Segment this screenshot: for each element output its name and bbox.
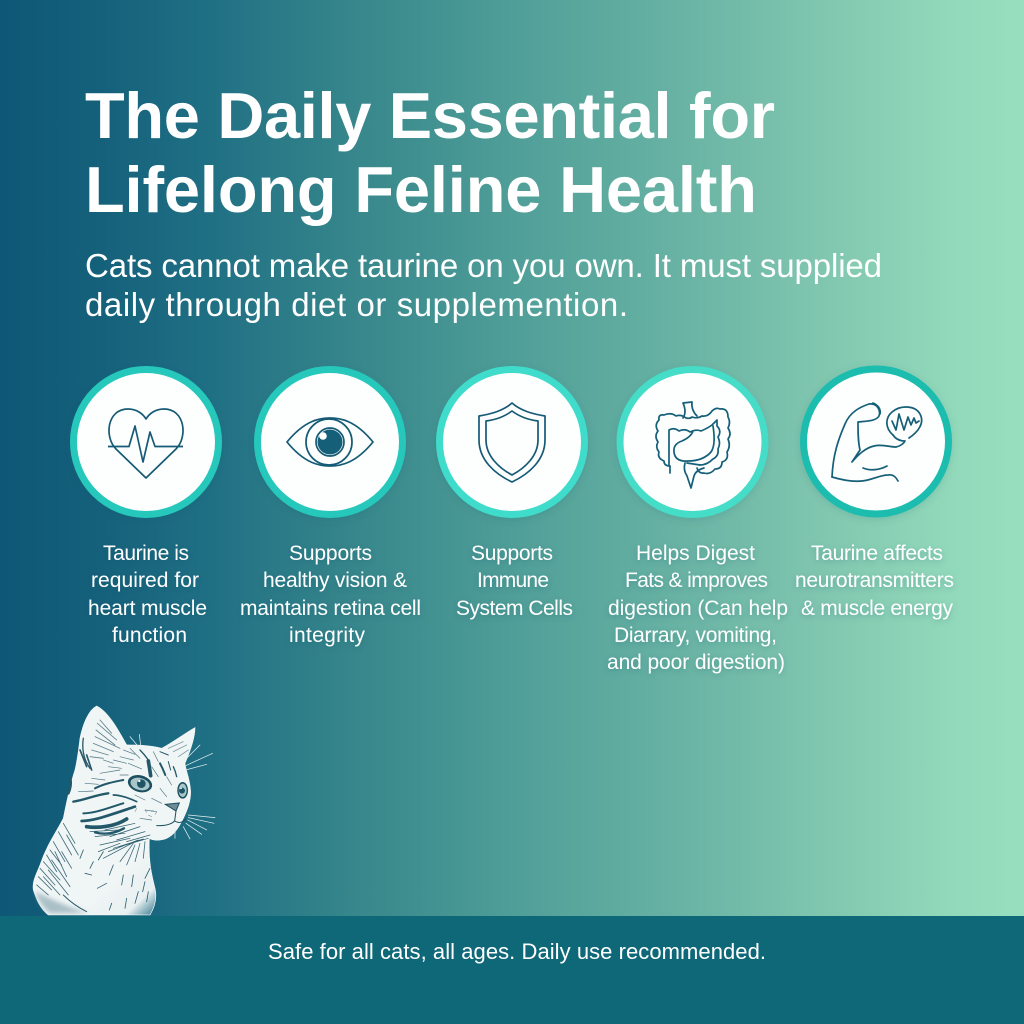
- footer text: Safe for all cats, all ages. Daily use recommended.: [268, 939, 766, 964]
- caption: immune: Immune: [477, 569, 549, 592]
- subtitle: Cats cannot make taurine on you own. It must supplied: [85, 247, 882, 284]
- icon: eye: [258, 370, 402, 514]
- caption: immune: Supports: [471, 542, 553, 565]
- caption: digestion: digestion (Can help: [608, 597, 788, 620]
- caption: digestion: [607, 542, 788, 674]
- eyes: [126, 772, 188, 799]
- title: The Daily Essential for: [85, 79, 775, 152]
- cat silhouette: [33, 706, 195, 915]
- neck ruff hair fan: [80, 823, 150, 910]
- caption: digestion: Helps Digest: [636, 542, 755, 565]
- left neck hatching: [37, 823, 87, 912]
- muzzle detail: [135, 808, 157, 817]
- caption: neurotransmitters and muscle: neurotransmitters: [795, 569, 954, 592]
- benefit: neurotransmitters and muscle: [795, 369, 954, 620]
- caption: heart: Taurine is: [103, 542, 189, 565]
- head stripes: [68, 750, 177, 834]
- benefit: vision: [240, 370, 421, 647]
- nose and mouth: [157, 803, 186, 826]
- caption: digestion: and poor digestion): [607, 651, 785, 674]
- caption: vision: [240, 542, 421, 647]
- subtitle: [85, 247, 882, 323]
- caption: vision: Supports: [289, 542, 372, 565]
- icon: heart with pulse: [74, 370, 218, 514]
- icon: shield: [440, 370, 584, 514]
- caption: neurotransmitters and muscle: Taurine affects: [811, 542, 943, 565]
- illustration: cat: [33, 706, 215, 915]
- caption: heart: required for: [91, 569, 199, 592]
- caption: neurotransmitters and muscle: & muscle energy: [801, 597, 954, 620]
- ear shading: [80, 720, 188, 770]
- icon: intestines: [620, 370, 765, 514]
- title: Lifelong Feline Health: [85, 153, 757, 226]
- title: [85, 79, 775, 226]
- caption: digestion: Diarrary, vomiting,: [614, 624, 777, 647]
- caption: heart: heart muscle: [88, 597, 207, 620]
- footer bar: [0, 916, 1024, 1024]
- benefit: heart: [74, 370, 218, 647]
- caption: immune: System Cells: [456, 597, 573, 620]
- caption: immune: [456, 542, 573, 620]
- whiskers: [130, 734, 215, 839]
- caption: vision: maintains retina cell: [240, 597, 421, 620]
- forehead fine hair: [78, 748, 172, 820]
- caption: heart: [88, 542, 207, 647]
- fur texture: [37, 720, 188, 912]
- benefit: digestion: [607, 370, 788, 674]
- benefit: immune: [440, 370, 584, 620]
- icon: flexed arm with signal bubble: [804, 369, 948, 514]
- caption: heart: function: [112, 624, 187, 647]
- caption: vision: healthy vision &: [263, 569, 407, 592]
- caption: vision: integrity: [289, 624, 366, 647]
- chest shadow: [35, 892, 88, 913]
- caption: neurotransmitters and muscle: [795, 542, 954, 620]
- subtitle: daily through diet or supplemention.: [85, 286, 628, 323]
- caption: digestion: Fats & improves: [625, 569, 768, 592]
